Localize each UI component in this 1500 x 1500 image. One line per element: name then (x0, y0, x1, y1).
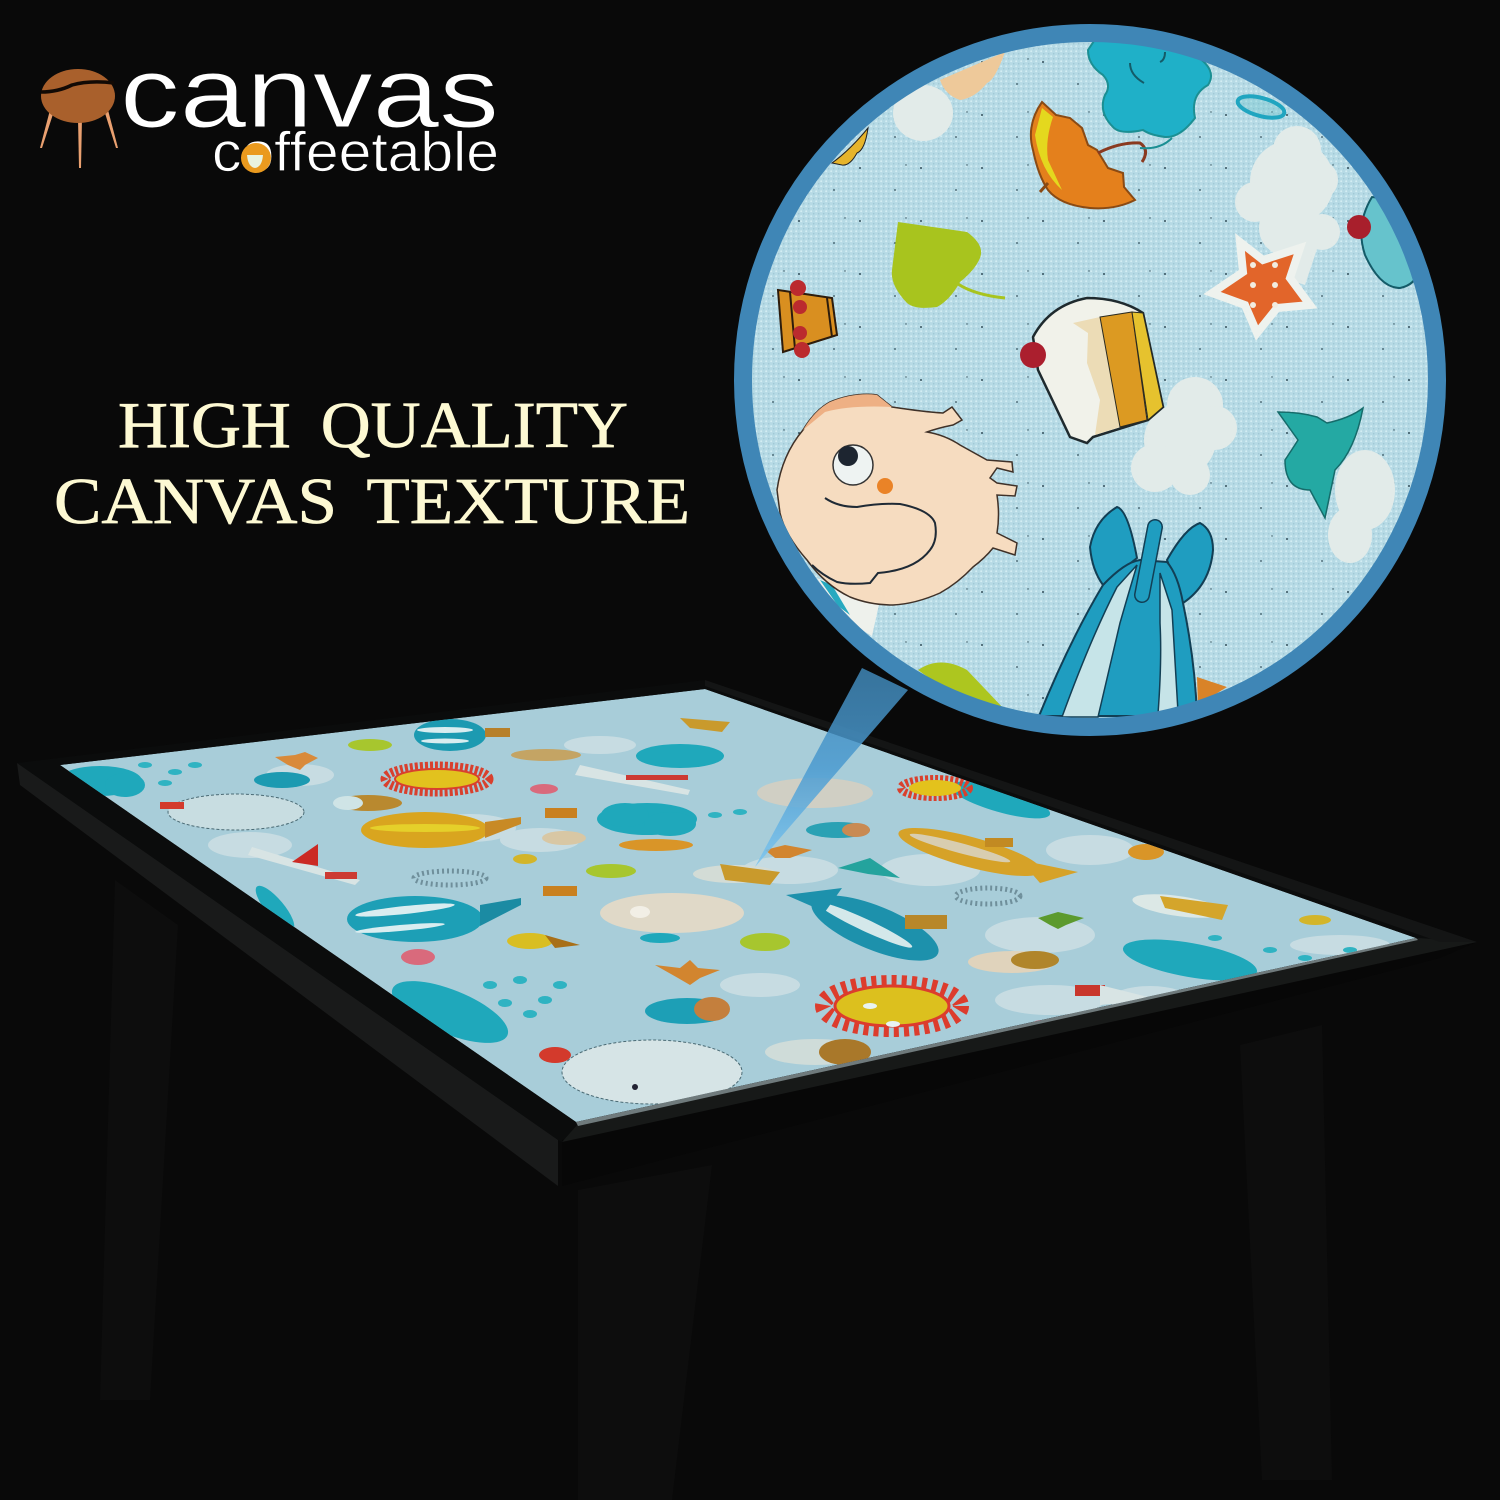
yellow fragment (832, 128, 868, 165)
raindrops (138, 762, 1357, 1018)
green leaf (892, 222, 1005, 308)
table surface pattern (58, 689, 1416, 1122)
bird (507, 933, 580, 949)
star (1212, 242, 1310, 333)
droplet (1236, 94, 1286, 120)
cupcakes (254, 749, 1059, 1065)
table frame (17, 680, 1477, 1186)
white whale 1 (160, 794, 304, 830)
hearts (401, 784, 1053, 1026)
crown (778, 280, 837, 358)
bees (513, 854, 1331, 925)
magnified canvas circle (743, 33, 1437, 727)
cherry edge object (1347, 197, 1420, 288)
logo subtitle: coffeetable (212, 120, 499, 183)
icon: coffee bean table (40, 69, 118, 168)
heading: HIGH QUALITY (118, 389, 628, 462)
cake (1020, 298, 1163, 443)
heading: CANVAS TEXTURE (54, 465, 690, 538)
blue zeppelin (1039, 507, 1227, 717)
umbrella (1031, 102, 1172, 208)
white wing behind (817, 578, 880, 636)
airplanes (248, 765, 1160, 1005)
coffee table (17, 680, 1477, 1186)
heading (54, 389, 690, 538)
body (1039, 560, 1197, 716)
bottom leaf (918, 662, 1005, 710)
stars (275, 752, 1084, 985)
body stripes (1062, 565, 1178, 717)
table legs (100, 880, 1332, 1500)
hot air balloon yellow (361, 808, 577, 848)
teal clouds (58, 744, 1260, 1056)
cake slices (680, 718, 1228, 922)
chick (600, 893, 744, 943)
white whale 2 (539, 1040, 742, 1104)
white clouds (893, 85, 1395, 563)
right fin (1167, 523, 1213, 603)
sun 1 (385, 766, 489, 792)
logo wordmark: canvas (120, 37, 499, 149)
umbrellas and hearts (542, 831, 1164, 860)
center fin (1142, 527, 1155, 595)
bird (1278, 408, 1363, 518)
leaves (348, 739, 790, 951)
hot air balloon teal (347, 886, 577, 942)
yellow dirigible (898, 828, 1078, 883)
zoom pointer (755, 668, 908, 867)
elephant faint (757, 778, 873, 808)
icon: coffee cup (241, 143, 271, 173)
small cupcake top (940, 52, 1005, 100)
teal cloud (1088, 35, 1211, 137)
circle border (743, 33, 1437, 727)
teal dirigible (786, 888, 947, 961)
dotted clouds (414, 871, 1020, 904)
elephant (777, 394, 1017, 636)
left fin (1090, 507, 1137, 585)
logo (40, 37, 499, 183)
sun 3 (901, 779, 969, 797)
orange cabin (1197, 677, 1227, 705)
pale clouds (208, 736, 1390, 1015)
balloon top teal (414, 719, 510, 751)
sun 2 (823, 983, 961, 1029)
